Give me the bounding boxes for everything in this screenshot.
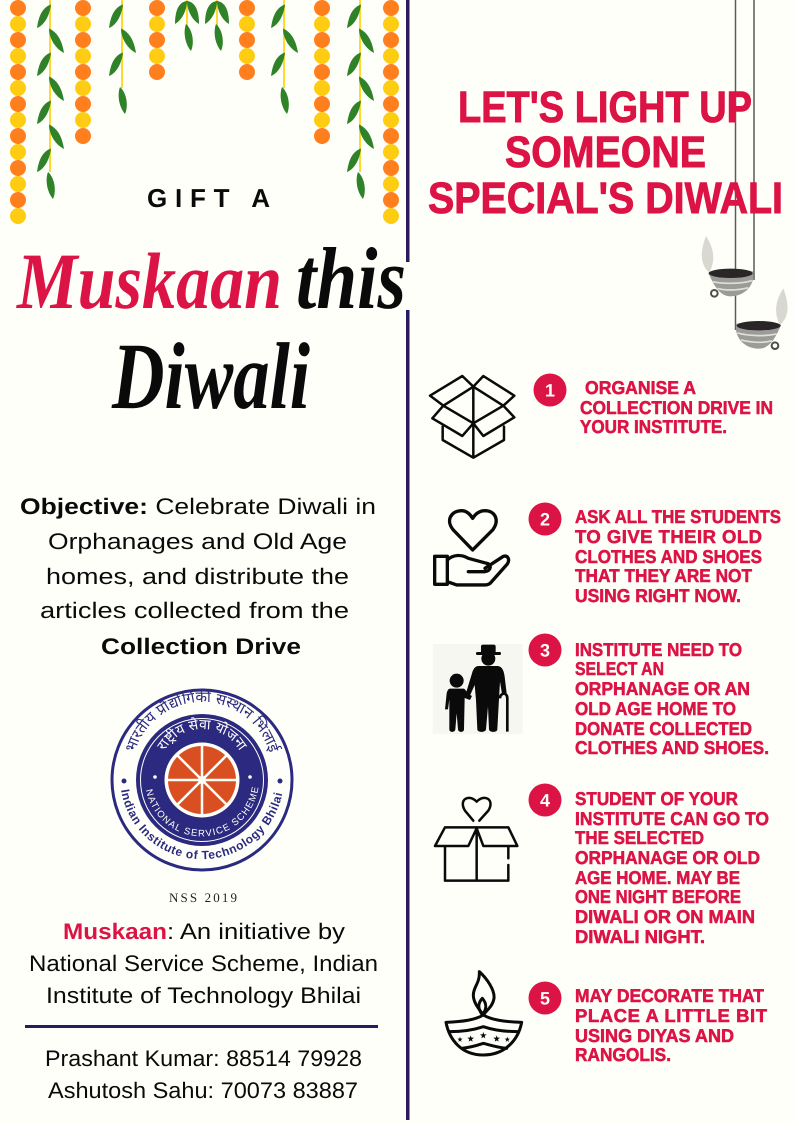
- step 4: [435, 784, 769, 947]
- icon: hanging diya lamps: [702, 236, 788, 349]
- step 4 text: ORPHANAGE OR OLD: [575, 847, 760, 868]
- step 1 text: [580, 377, 773, 437]
- NSS IIT Bhilai logo: भारतीय प्रौद्योगिकी संस्थान भिलाई: [126, 688, 282, 752]
- step 5 text: USING DIYAS AND: [575, 1025, 734, 1046]
- script title: Muskaan: [15, 238, 282, 326]
- NSS IIT Bhilai logo: Indian Institute of Technology Bhilai: [121, 789, 282, 860]
- heading: [428, 83, 783, 223]
- step 2: [435, 502, 781, 606]
- step 5 text: PLACE A LITTLE BIT: [575, 1005, 768, 1026]
- icon: gift box with heart: [435, 798, 517, 881]
- number badge 3: [528, 634, 562, 666]
- step 5: [446, 972, 768, 1065]
- initiative text: National Service Scheme, Indian: [29, 951, 378, 976]
- hanging string lines: [736, 0, 754, 330]
- number badge 5: [528, 982, 562, 1014]
- step 4 text: DIWALI OR ON MAIN: [575, 906, 755, 927]
- step 2 text: THAT THEY ARE NOT: [575, 565, 753, 586]
- icon: open box: [430, 376, 514, 458]
- icon: elder and child: [433, 644, 523, 734]
- contacts: Ashutosh Sahu: 70073 83887: [48, 1078, 358, 1103]
- step 5 text: RANGOLIS.: [575, 1044, 671, 1065]
- heading: LET'S LIGHT UP: [458, 83, 752, 132]
- number badge 4: [528, 784, 562, 816]
- contacts: Prashant Kumar: 88514 79928: [45, 1046, 362, 1071]
- step 2 text: USING RIGHT NOW.: [575, 585, 741, 606]
- heading: SOMEONE: [505, 128, 706, 177]
- step 3 text: SELECT AN: [575, 658, 664, 679]
- step 3 text: CLOTHES AND SHOES.: [575, 737, 769, 758]
- objective text: Collection Drive: [101, 634, 301, 659]
- center divider line: [406, 0, 410, 1120]
- step 4 text: ONE NIGHT BEFORE: [575, 886, 741, 907]
- step 3 text: INSTITUTE NEED TO: [575, 639, 742, 660]
- NSS IIT Bhilai logo: NATIONAL SERVICE SCHEME: [146, 786, 258, 836]
- step 2 text: TO GIVE THEIR OLD: [575, 526, 762, 547]
- step 3 text: ORPHANAGE OR AN: [575, 678, 750, 699]
- objective text: Objective: Celebrate Diwali in: [20, 494, 376, 519]
- number badge 3: 3: [540, 640, 550, 660]
- number badge 2: [528, 502, 562, 536]
- step 4 text: DIWALI NIGHT.: [575, 926, 705, 947]
- step 1 text: COLLECTION DRIVE IN: [580, 397, 773, 418]
- step 4 text: [575, 788, 769, 947]
- step 3 text: OLD AGE HOME TO: [575, 698, 736, 719]
- initiative text: Muskaan: [63, 919, 167, 944]
- step 2 text: CLOTHES AND SHOES: [575, 546, 762, 567]
- initiative text: : An initiative by: [167, 919, 346, 944]
- step 5 text: [575, 985, 768, 1065]
- initiative text: Institute of Technology Bhilai: [46, 983, 361, 1008]
- gift a label: GIFT A: [147, 183, 270, 213]
- step 3 text: [575, 639, 769, 758]
- step 3 text: DONATE COLLECTED: [575, 718, 752, 739]
- step 5 text: MAY DECORATE THAT: [575, 985, 765, 1006]
- step 4 text: THE SELECTED: [575, 827, 704, 848]
- step 1: [430, 374, 773, 458]
- icon: heart in hand: [435, 511, 509, 585]
- step 2 text: [575, 506, 781, 606]
- number badge 2: 2: [540, 510, 550, 530]
- step 4 text: INSTITUTE CAN GO TO: [575, 808, 769, 829]
- step 1 text: ORGANISE A: [585, 377, 696, 398]
- objective text: articles collected from the: [40, 598, 349, 623]
- step 4 text: STUDENT OF YOUR: [575, 788, 738, 809]
- number badge 4: 4: [540, 790, 550, 810]
- step 1 text: YOUR INSTITUTE.: [580, 416, 727, 437]
- objective text: homes, and distribute the: [46, 564, 349, 589]
- number badge 5: 5: [540, 988, 550, 1008]
- marigold garlands and mango leaf strings: [10, 0, 399, 224]
- step 4 text: AGE HOME. MAY BE: [575, 867, 740, 888]
- contacts: [45, 1046, 362, 1103]
- number badge 1: [534, 374, 566, 406]
- objective text: Orphanages and Old Age: [48, 529, 347, 554]
- logo caption: NSS 2019: [169, 890, 237, 905]
- script title: [15, 231, 406, 429]
- NSS IIT Bhilai logo: राष्ट्रीय सेवा योजना: [157, 717, 247, 750]
- step 3: [433, 634, 769, 758]
- NSS IIT Bhilai logo: [110, 688, 294, 872]
- contact divider: [25, 1025, 378, 1028]
- initiative text: [29, 919, 378, 1008]
- script title: Diwali: [111, 323, 310, 429]
- objective text: [20, 494, 376, 659]
- script title: this: [296, 231, 406, 328]
- number badge 1: 1: [545, 380, 555, 400]
- icon: diya: [446, 972, 522, 1055]
